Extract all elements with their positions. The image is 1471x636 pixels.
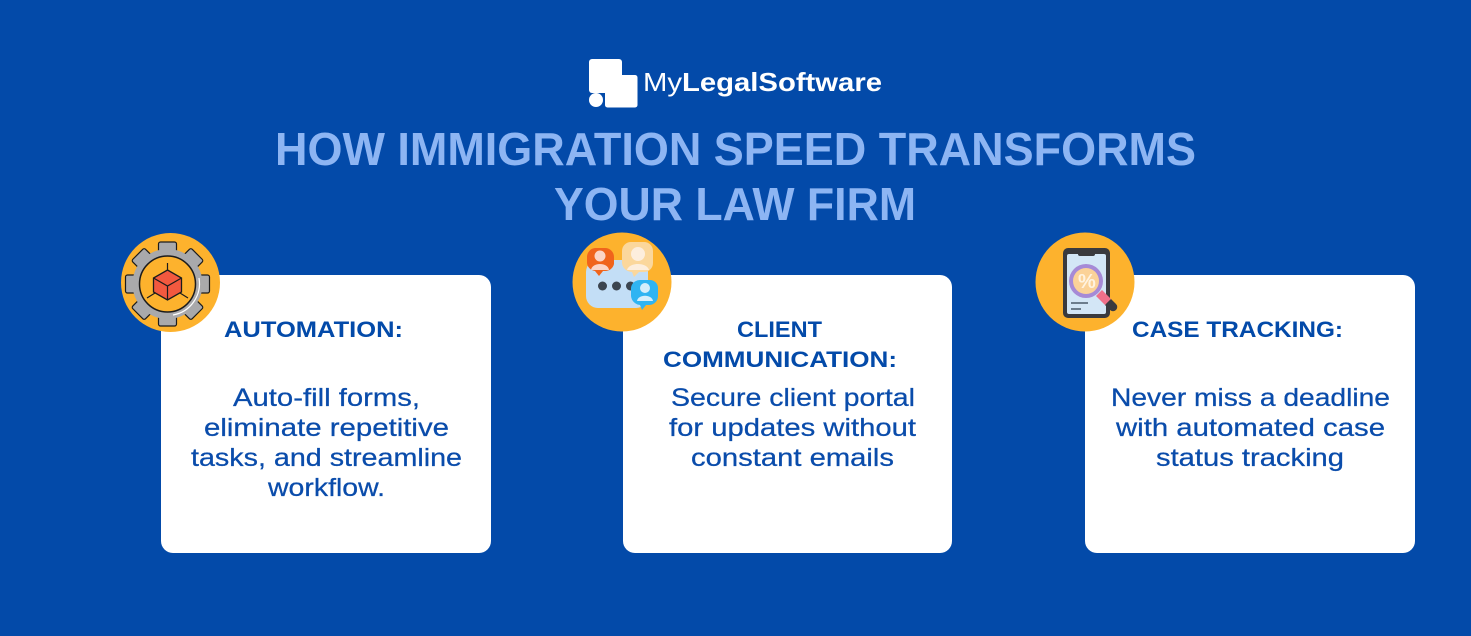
- text: case tracking description: [1111, 384, 1390, 472]
- title: HOW IMMIGRATION SPEED TRANSFORMS: [275, 123, 1196, 175]
- icon: gear with cube: [121, 233, 220, 332]
- icon: chat bubbles: [572, 232, 672, 332]
- heading: client communication: [663, 317, 897, 372]
- title: YOUR LAW FIRM: [554, 178, 916, 230]
- text: automation description: workflow.: [267, 474, 385, 502]
- text: client communication description: constant emails: [691, 444, 894, 472]
- icon: phone with magnifier: %: [1078, 271, 1096, 293]
- text: client communication description: [669, 384, 916, 472]
- logo: MyLegalSoftware: [643, 67, 882, 97]
- text: client communication description: Secure client portal: [671, 384, 915, 412]
- text: automation description: Auto-fill forms,: [233, 384, 420, 412]
- text: case tracking description: status tracking: [1156, 444, 1344, 472]
- logo: [589, 59, 882, 108]
- title: [275, 123, 1196, 230]
- heading: case tracking: CASE TRACKING:: [1132, 317, 1343, 342]
- text: automation description: tasks, and streamline: [191, 444, 462, 472]
- panel: client communication: [623, 275, 952, 553]
- text: case tracking description: Never miss a deadline: [1111, 384, 1390, 412]
- text: automation description: eliminate repetitive: [204, 414, 449, 442]
- text: client communication description: for updates without: [669, 414, 916, 442]
- panel: case tracking: [1085, 275, 1415, 553]
- icon: phone with magnifier: [1036, 232, 1134, 332]
- heading: automation: AUTOMATION:: [224, 317, 403, 342]
- heading: client communication: COMMUNICATION:: [663, 347, 897, 372]
- heading: client communication: CLIENT: [737, 317, 823, 342]
- text: automation description: [191, 384, 462, 502]
- panel: automation: [161, 275, 491, 553]
- text: case tracking description: with automated case: [1115, 414, 1385, 442]
